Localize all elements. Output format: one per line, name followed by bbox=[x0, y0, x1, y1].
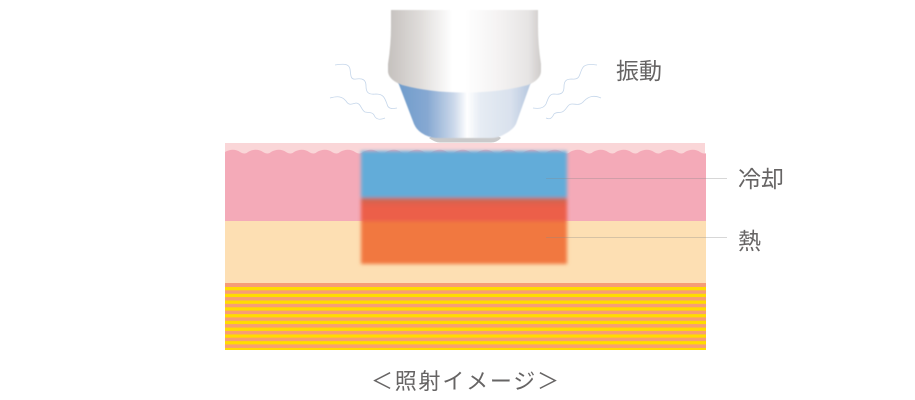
leader line: heat bbox=[546, 236, 727, 238]
dermis layer bbox=[225, 150, 708, 221]
illustration: ultrasound probe on skin cross-section bbox=[225, 10, 782, 391]
label: cooling: 冷却 bbox=[738, 166, 784, 192]
panel: skin cross-section bbox=[225, 143, 708, 350]
vibration waves right bbox=[533, 64, 601, 119]
fat layer bbox=[225, 221, 706, 283]
treatment zone: cooling and heating blocks bbox=[361, 151, 567, 264]
probe handle bbox=[388, 10, 541, 92]
leader line: cooling bbox=[546, 178, 727, 180]
label: heat: 熱 bbox=[738, 228, 761, 254]
muscle layer stripes bbox=[225, 283, 706, 350]
probe tip bbox=[429, 136, 501, 142]
icon: probe bbox=[388, 10, 541, 142]
caption: ＜照射イメージ＞ bbox=[371, 369, 559, 394]
skin surface layer bbox=[225, 143, 705, 157]
probe blue head bbox=[398, 82, 531, 138]
vibration waves left bbox=[330, 64, 397, 119]
label: vibration: 振動 bbox=[616, 58, 662, 84]
